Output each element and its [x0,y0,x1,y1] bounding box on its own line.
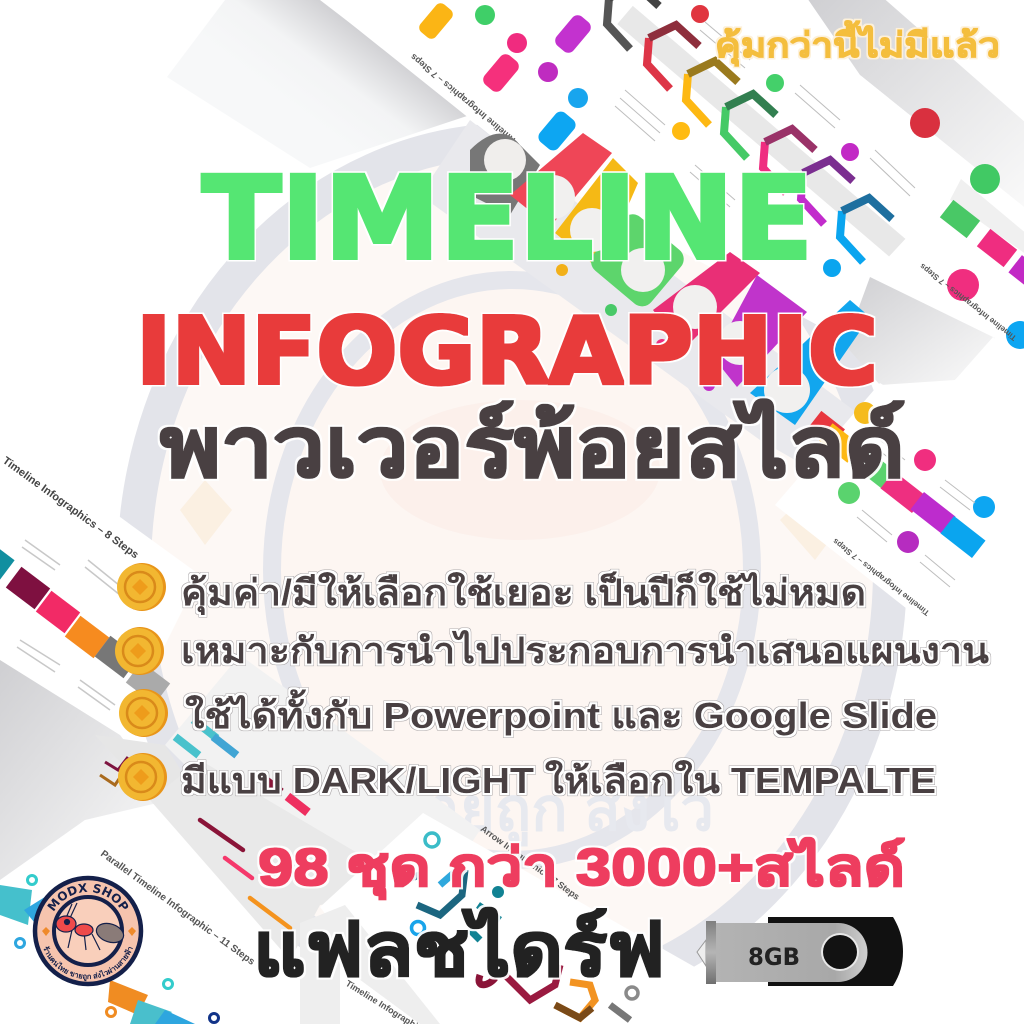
slide: right-hand ribbon strip [775,383,1024,627]
slide: parallel timeline eleven steps: Parallel Timeline Infographic – 11 Steps [98,849,257,968]
slide: right date panel [955,337,1024,470]
slide: hexagon chevron timeline [540,0,961,340]
icon: coin 2 [115,627,164,675]
bullet text 2: เหมาะกับการนำไปประกอบการนำเสนอแผนงาน [181,629,989,671]
logo top text: MODX SHOP [47,883,128,912]
chevron 4 [724,94,776,158]
slide: bottom centre timeline [300,813,700,1024]
title: TIMELINE: TIMELINE [202,152,813,285]
chevron 2 [647,25,699,89]
bullet text 4: มีแบบ DARK/LIGHT ให้เลือกใน TEMPALTE [181,759,936,801]
slide: upside-down seven steps [315,0,647,175]
chevron 7 [840,198,892,262]
icon: USB flash drive [697,917,903,986]
bullet text 3: ใช้ได้ทั้งกับ Powerpoint และ Google Slide [185,689,937,736]
chevron 5 [763,129,815,193]
title: INFOGRAPHIC: INFOGRAPHIC [136,298,878,405]
icon: coin 1 [117,563,166,611]
promo tag: คุ้มกว่านี้ไม่มีแล้ว [715,20,1000,67]
pack count callout: 98 ชุด กว่า 3000+สไลด์ [258,837,905,900]
flash drive label: แฟลชไดร์ฟ [253,906,665,991]
slide: top right circles [860,75,1024,349]
slide: parallel timeline eleven steps [0,820,300,1024]
logo bottom text: ร้านคนไทย ขายถูก ส่งไวผ่านสายฟ้า [44,946,133,982]
slide: large coloured tiles [470,133,870,425]
icon: ant [56,903,126,950]
icon: coin 4 [118,753,167,801]
icon: USB flash drive: 8GB [748,943,800,971]
watermark logo: ขายถูก ส่งไว [385,774,714,847]
faint background slide [167,0,470,168]
subtitle: พาวเวอร์พ้อยสไลด์ [160,399,905,494]
bullet text 1: คุ้มค่า/มีให้เลือกใช้เยอะ เป็นปีก็ใช้ไม่หมด [181,570,866,616]
slide shadow right [845,277,995,385]
slide: eight steps timeline: Timeline Infographics – 8 Steps [0,455,141,561]
slide shadow top right [805,0,1024,215]
watermark logo [134,140,890,1000]
slide: top right circles: Timeline Infographics – 7 Steps [918,261,1018,343]
slide: eight steps timeline [0,430,200,880]
chevron 6 [801,160,853,224]
icon: coin 3 [119,689,168,737]
chevron 3 [686,61,738,125]
slide: upside-down seven steps: Timeline Infographics – 7 Steps [409,52,518,146]
slide: right-hand ribbon strip: Timeline Infographics – 7 Steps [831,536,931,618]
slide: navigation timeline [95,655,480,890]
slide: strip across dates band [420,120,880,480]
slide: gantt bars [150,760,420,960]
slide: bottom centre timeline: Arrow Infographic – 7 Steps [479,824,581,902]
chevron 1 [607,0,659,49]
logo: MODX Shop badge [32,876,144,986]
bullet list [115,563,989,801]
